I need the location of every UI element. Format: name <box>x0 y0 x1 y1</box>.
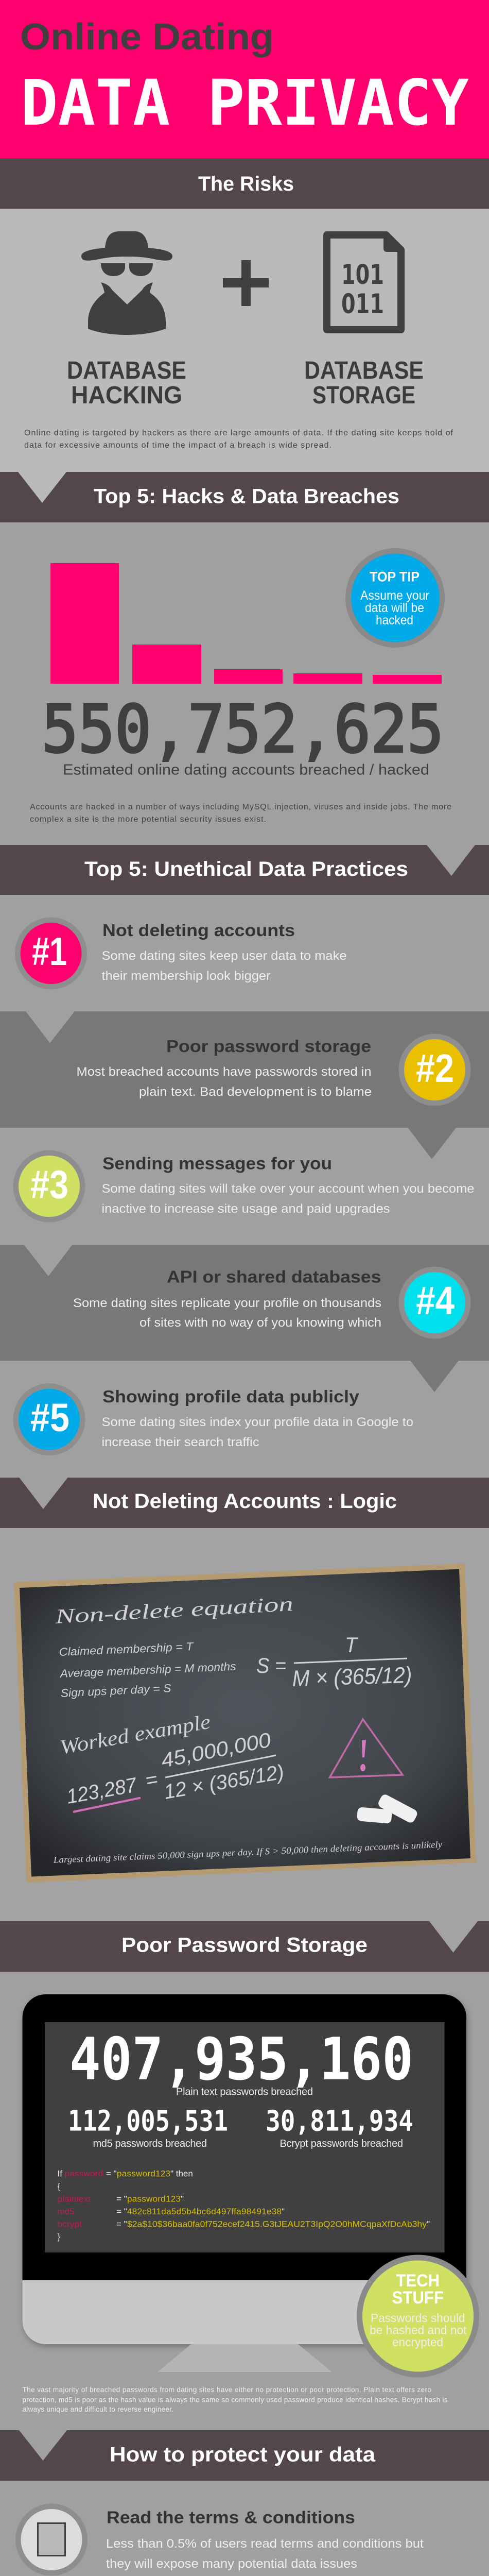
body text: increase their search traffic <box>102 1435 259 1449</box>
caption: accounts breached: Estimated online dating accounts breached / hacked <box>63 761 429 778</box>
code snippet: password <box>65 2169 103 2178</box>
chalk definitions <box>59 1640 236 1700</box>
big number: accounts breached: 550,752,625 <box>42 691 444 767</box>
text block: password note: protection, md5 is poor as the hash value is always the same so commonly used password produce identical hashes. Bcrypt hash is <box>23 2396 448 2404</box>
text block: risks intro: data for excessive amounts of time the impact of a breach is wide spread. <box>24 441 331 450</box>
caption: bcrypt: Bcrypt passwords breached <box>280 2138 403 2149</box>
icon: plus <box>223 260 269 306</box>
bar chart <box>50 563 442 684</box>
badge: #5 <box>13 1383 85 1455</box>
body text <box>102 1415 413 1449</box>
chalk equation: S = <box>256 1653 286 1677</box>
body text: Some dating sites index your profile data in Google to <box>102 1415 413 1429</box>
code snippet: password123 <box>127 2194 181 2204</box>
panel: practice 5 <box>0 1361 489 1478</box>
callout: tech stuff <box>357 2255 479 2377</box>
label: database storage: DATABASE <box>304 357 424 384</box>
chalk equation: M × (365/12) <box>292 1663 412 1691</box>
chalk note: Largest dating site claims 50,000 sign ups per day. If S > 50,000 then deleting accounts is unlikely <box>53 1839 443 1865</box>
chalk worked equation: = <box>144 1768 160 1792</box>
code snippet: md5 <box>58 2207 74 2216</box>
chalk pieces <box>357 1793 419 1824</box>
chalk definitions: Claimed membership = T <box>59 1640 195 1658</box>
code snippet: " <box>282 2207 285 2216</box>
heading: Top 5 hacks and data breaches: Top 5: Hacks & Data Breaches <box>94 485 399 508</box>
panel: practice 4 <box>0 1245 489 1361</box>
number: bcrypt: 30,811,934 <box>266 2104 413 2137</box>
code snippet: plaintext <box>58 2194 91 2204</box>
chalk heading: worked example: Worked example <box>58 1710 212 1759</box>
title: Online Dating: Online Dating <box>20 16 274 58</box>
body text: plain text. Bad development is to blame <box>139 1085 372 1099</box>
panel: password storage <box>0 1972 489 2431</box>
panel: the risks <box>0 209 489 472</box>
callout: top tip: TOP TIP <box>370 569 420 585</box>
callout: tech stuff: Passwords should <box>371 2311 465 2325</box>
heading: Top 5 unethical data practices <box>0 845 489 895</box>
chalk equation: T <box>345 1633 359 1657</box>
heading: How to protect your data <box>0 2430 489 2481</box>
text block: breaches note: complex a site is the more potential security issues exist. <box>30 815 266 824</box>
subheading: Read the terms & conditions <box>107 2508 355 2527</box>
badge: #2 <box>398 1033 470 1106</box>
body text <box>106 2537 424 2571</box>
badge: #4: #4 <box>416 1279 455 1323</box>
subheading: Sending messages for you <box>102 1154 332 1173</box>
text block: breaches note <box>30 803 451 824</box>
screen <box>45 2022 445 2252</box>
chalk equation <box>256 1633 412 1691</box>
subheading: Not deleting accounts <box>102 921 295 940</box>
code snippet: " then <box>170 2169 193 2178</box>
badge: #3 <box>13 1150 85 1222</box>
monitor <box>23 1994 466 2372</box>
body text: they will expose many potential data issues <box>106 2557 357 2571</box>
body text <box>73 1296 381 1330</box>
text block: password note: The vast majority of breached passwords from dating sites have either no protection or poor protection. Plain text offers zero <box>23 2386 431 2394</box>
panel: practice 1 <box>0 895 489 1011</box>
text block: password note: always unique and difficult to reverse engineer. <box>23 2405 173 2413</box>
icon: binary file: 011 <box>341 289 384 320</box>
icon: hacker <box>81 231 172 335</box>
code snippet: " <box>427 2219 430 2229</box>
chalkboard frame <box>14 1564 476 1883</box>
icon: document <box>15 2504 88 2576</box>
subheading: API or shared databases <box>167 1267 381 1286</box>
heading: Not deleting accounts logic <box>0 1478 489 1528</box>
number: md5: 112,005,531 <box>68 2104 228 2137</box>
code snippet: = " <box>106 2169 117 2178</box>
body text: Some dating sites will take over your account when you become <box>102 1182 475 1196</box>
body text: inactive to increase site usage and paid upgrades <box>102 1202 390 1216</box>
body text: Less than 0.5% of users read terms and conditions but <box>106 2537 424 2551</box>
badge: #5: #5 <box>30 1396 69 1440</box>
badge: #4 <box>398 1266 470 1338</box>
label: database hacking: HACKING <box>71 382 182 409</box>
badge: #1: #1 <box>32 929 67 974</box>
chalk heading: non-delete equation: Non-delete equation <box>54 1592 294 1628</box>
badge: #2: #2 <box>416 1046 454 1091</box>
panel: hero banner <box>0 0 489 158</box>
label: database hacking <box>67 357 186 409</box>
heading: How to protect your data: How to protect your data <box>110 2443 376 2466</box>
chalk definitions: Sign ups per day = S <box>60 1682 171 1700</box>
code snippet: bcrypt <box>58 2219 82 2229</box>
heading: The Risks <box>0 158 489 209</box>
chalk worked equation: 123,287 <box>65 1773 139 1808</box>
body text: of sites with no way of you knowing which <box>139 1316 381 1330</box>
code snippet: } <box>58 2232 61 2242</box>
callout: tech stuff: encrypted <box>392 2335 443 2349</box>
chalkboard <box>20 1569 470 1876</box>
caption: plain text: Plain text passwords breached <box>176 2087 313 2098</box>
heading: Top 5 unethical data practices: Top 5: Unethical Data Practices <box>84 858 408 880</box>
code snippet: " <box>181 2194 184 2204</box>
callout: top tip: data will be <box>365 601 424 615</box>
callout: tech stuff: TECH <box>396 2271 440 2291</box>
chalk definitions: Average membership = M months <box>59 1660 236 1680</box>
body text: Some dating sites replicate your profile on thousands <box>73 1296 381 1310</box>
body text <box>76 1065 372 1099</box>
text block: password note <box>23 2386 448 2413</box>
heading: The Risks: The Risks <box>198 173 294 195</box>
code snippet: If <box>58 2169 62 2178</box>
icon: chalk warning triangle <box>329 1719 403 1777</box>
text block: risks intro <box>24 429 453 450</box>
chalk worked equation <box>65 1728 286 1812</box>
big number: plain text: 407,935,160 <box>69 2025 413 2093</box>
icon: binary file <box>327 233 403 330</box>
panel: hacks and breaches <box>0 522 489 845</box>
code snippet: = " <box>116 2194 127 2204</box>
icon: binary file: 101 <box>341 259 384 291</box>
heading: Top 5 hacks and data breaches <box>0 472 489 522</box>
panel: practice 2 <box>0 1011 489 1128</box>
badge: #1 <box>15 917 87 989</box>
text block: breaches note: Accounts are hacked in a number of ways including MySQL injection, viruses and inside jobs. The more <box>30 803 451 811</box>
caption: md5: md5 passwords breached <box>93 2138 207 2149</box>
heading: Poor password storage: Poor Password Storage <box>121 1934 368 1957</box>
panel: chalkboard section <box>0 1528 489 1921</box>
code snippet <box>58 2169 430 2242</box>
body text: Some dating sites keep user data to make <box>102 949 347 963</box>
label: database storage <box>304 357 424 409</box>
callout: tech stuff: STUFF <box>392 2288 444 2308</box>
subheading: Showing profile data publicly <box>102 1387 360 1406</box>
chalk worked equation: 45,000,000 <box>159 1728 273 1772</box>
code snippet: { <box>58 2181 61 2191</box>
heading: Poor password storage <box>0 1921 489 1972</box>
callout: top tip: hacked <box>376 613 413 628</box>
body text <box>102 949 347 983</box>
body text: Most breached accounts have passwords stored in <box>76 1065 372 1079</box>
callout: top tip: Assume your <box>360 588 429 603</box>
code snippet: password123 <box>117 2169 170 2178</box>
subheading: Poor password storage <box>166 1037 371 1056</box>
callout: tech stuff: be hashed and not <box>370 2324 467 2337</box>
body text <box>102 1182 475 1216</box>
code snippet: $2a$10$36baa0fa0f752ecef2415.G3tJEAU2T3IpQ2O0hMCqpaXfDcAb3hy <box>127 2219 427 2229</box>
code snippet: = " <box>116 2207 127 2216</box>
chalk worked equation: 12 × (365/12) <box>162 1760 286 1804</box>
panel: practice 3 <box>0 1128 489 1245</box>
callout: top tip <box>345 548 445 648</box>
panel: read the terms <box>0 2481 489 2576</box>
heading: Not deleting accounts logic: Not Deleting Accounts : Logic <box>93 1490 397 1513</box>
label: database hacking: DATABASE <box>67 357 186 384</box>
title: Data Privacy: DATA PRIVACY <box>21 66 469 140</box>
code snippet: 482c811da5d5b4bc6d497ffa98491e38 <box>127 2207 282 2216</box>
body text: their membership look bigger <box>102 969 271 983</box>
code snippet: = " <box>116 2219 127 2229</box>
badge: #3: #3 <box>30 1162 68 1207</box>
text block: risks intro: Online dating is targeted by hackers as there are large amounts of data. If the dating site keeps hold of <box>24 429 453 437</box>
label: database storage: STORAGE <box>312 382 415 409</box>
